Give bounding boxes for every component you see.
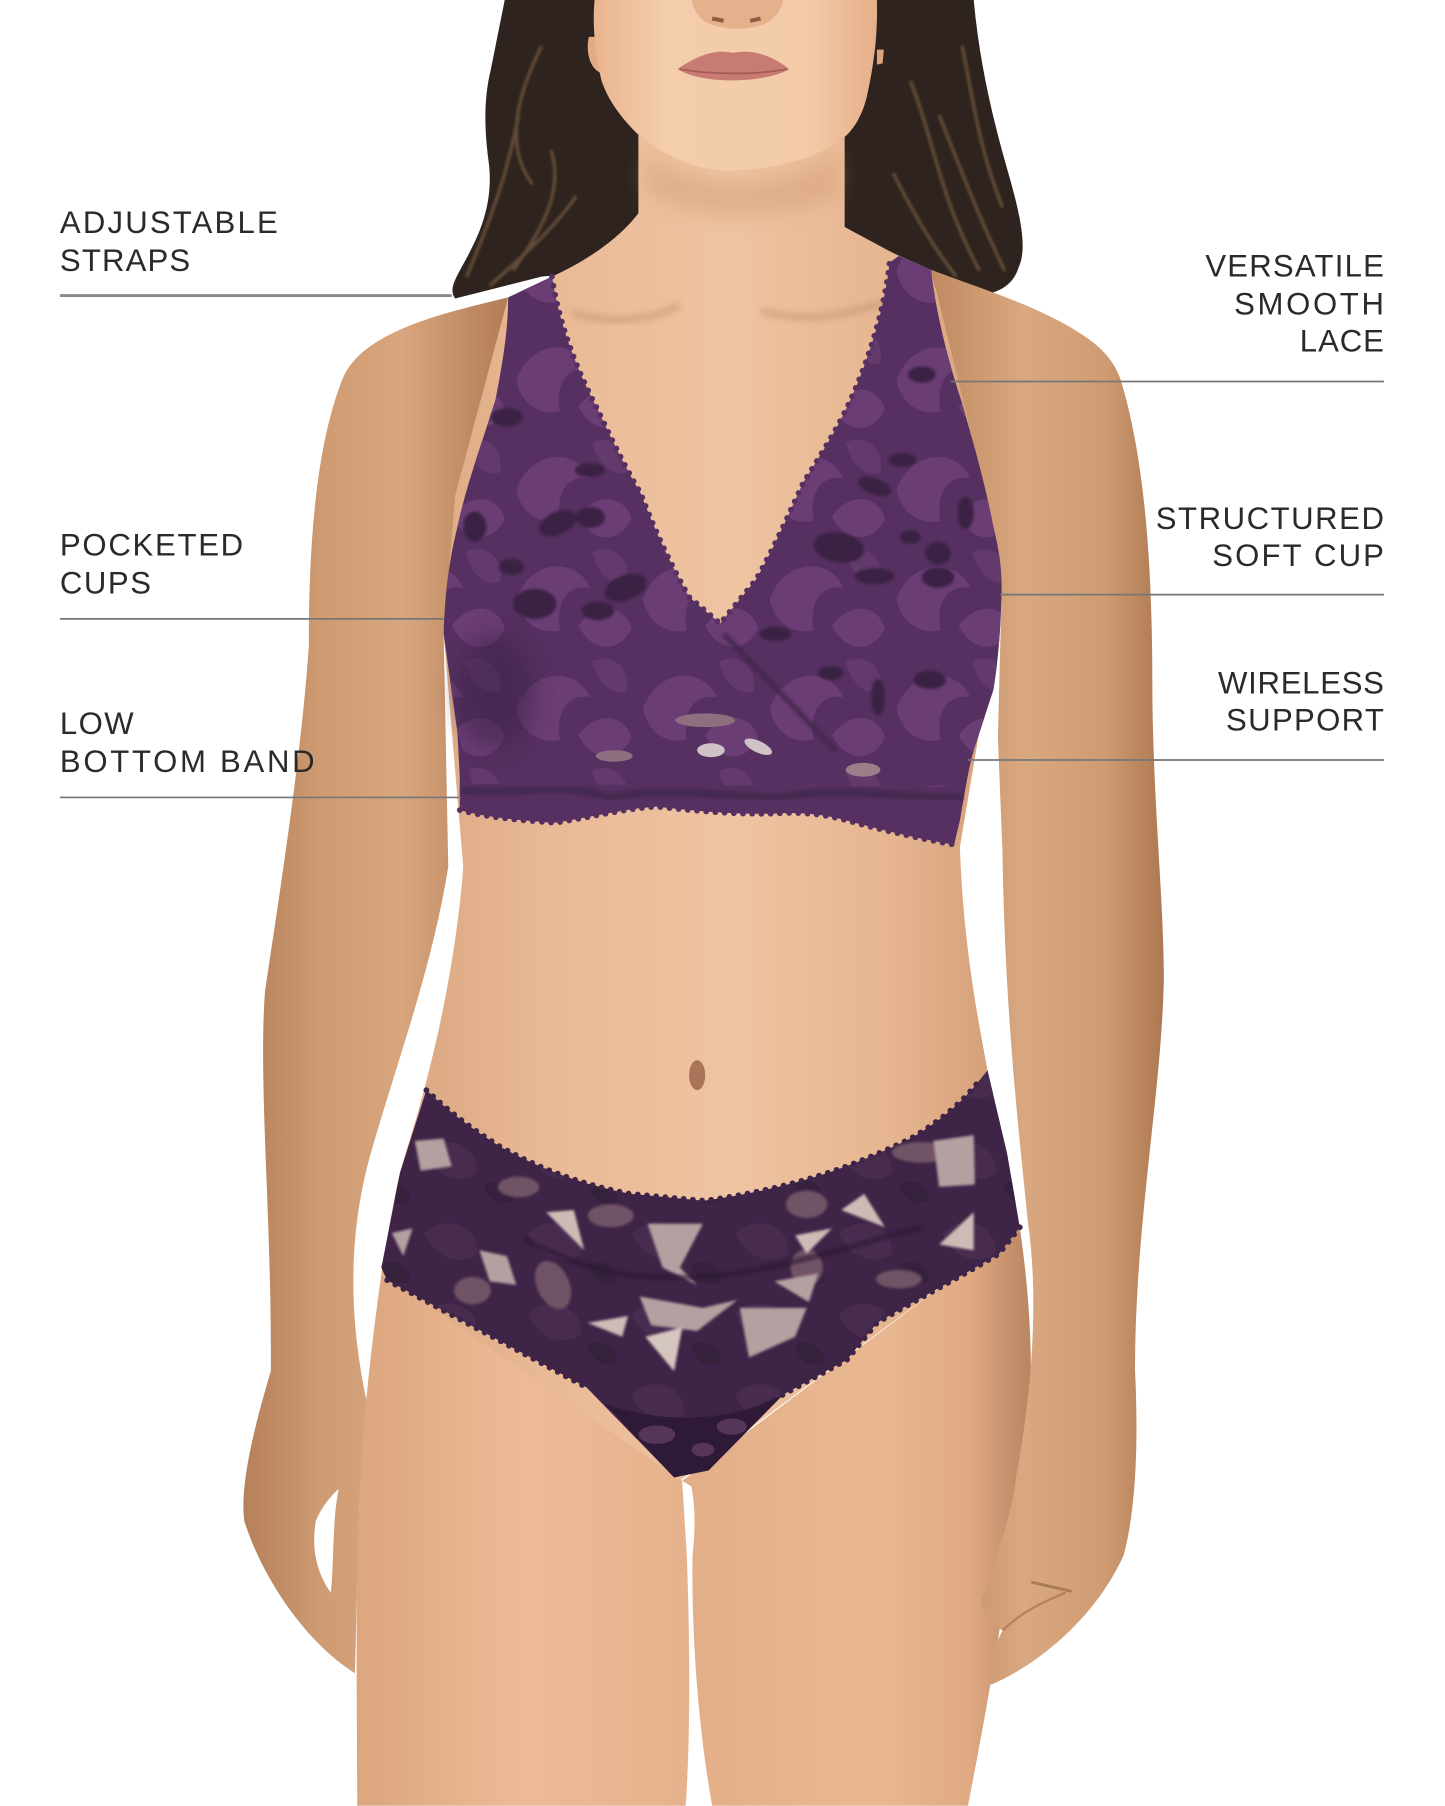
nose — [691, 0, 784, 29]
right ear — [877, 50, 884, 65]
left ear — [588, 37, 604, 74]
chin shadow — [645, 156, 839, 216]
left arm — [243, 297, 508, 1673]
briefs base — [381, 1071, 1020, 1477]
hair mass — [452, 0, 1023, 298]
callout: structured soft cup — [1000, 501, 1384, 595]
label line 1: ADJUSTABLE — [60, 205, 278, 240]
band lace — [461, 789, 963, 797]
bralette — [444, 256, 1002, 845]
left hand gap — [314, 1489, 339, 1593]
label line 2: STRAPS — [60, 243, 190, 278]
callout: low bottom band — [60, 706, 461, 797]
callout: versatile smooth lace — [951, 249, 1384, 381]
bralette base — [444, 256, 1002, 845]
callout: adjustable straps — [60, 205, 452, 296]
sheer center mesh — [596, 713, 880, 777]
mauve mesh — [675, 713, 735, 727]
dark mesh patches — [463, 366, 974, 716]
lip line — [680, 69, 787, 74]
gusset — [605, 1394, 784, 1477]
scalloped briefs edge — [387, 1083, 1020, 1407]
lips — [678, 52, 789, 80]
dark folds — [524, 1227, 922, 1278]
callout: pocketed cups — [60, 527, 444, 619]
sheer mesh patches — [392, 1135, 975, 1371]
leader line — [60, 294, 452, 297]
body — [381, 133, 1020, 1481]
cup shading — [456, 634, 535, 749]
briefs — [381, 1071, 1020, 1477]
leader line — [951, 380, 1384, 382]
label line 3: LACE — [1300, 324, 1384, 359]
leader line — [60, 796, 461, 798]
nostrils — [712, 18, 761, 21]
leader line — [60, 618, 444, 620]
gusset lace — [638, 1419, 747, 1457]
navel — [689, 1060, 705, 1090]
label line 1: VERSATILE — [1205, 249, 1384, 284]
briefs lace — [381, 1071, 1020, 1477]
bralette lace lobes — [444, 256, 1002, 787]
hair highlights — [467, 46, 1005, 286]
right hand finger line — [1003, 1593, 1066, 1631]
left thigh — [357, 1273, 689, 1806]
hair — [452, 0, 1023, 298]
collarbone shadows — [573, 302, 885, 320]
label line 2: SOFT CUP — [1212, 538, 1384, 573]
leader line — [968, 759, 1384, 761]
label line 2: SUPPORT — [1226, 703, 1384, 738]
label line 1: WIRELESS — [1218, 666, 1384, 701]
label line 1: LOW — [60, 706, 134, 741]
right arm — [931, 270, 1164, 1685]
label line 2: CUPS — [60, 565, 151, 600]
light mesh right — [742, 735, 774, 758]
right thigh — [682, 1227, 1031, 1806]
face — [594, 0, 877, 171]
scalloped edges — [460, 263, 954, 845]
inner thigh gap — [682, 1487, 695, 1556]
ring — [1031, 1582, 1072, 1591]
mauve lace areas — [454, 1142, 952, 1315]
cross-over seam — [724, 634, 835, 750]
leader line — [1000, 594, 1384, 596]
right mesh — [846, 763, 880, 777]
label line 2: BOTTOM BAND — [60, 744, 315, 779]
label line 2: SMOOTH — [1234, 287, 1384, 322]
label line 1: POCKETED — [60, 527, 243, 562]
model figure — [243, 0, 1164, 1806]
label line 1: STRUCTURED — [1156, 501, 1384, 536]
light mesh — [697, 743, 725, 757]
left mesh — [596, 750, 633, 762]
callout: wireless support — [968, 666, 1384, 760]
